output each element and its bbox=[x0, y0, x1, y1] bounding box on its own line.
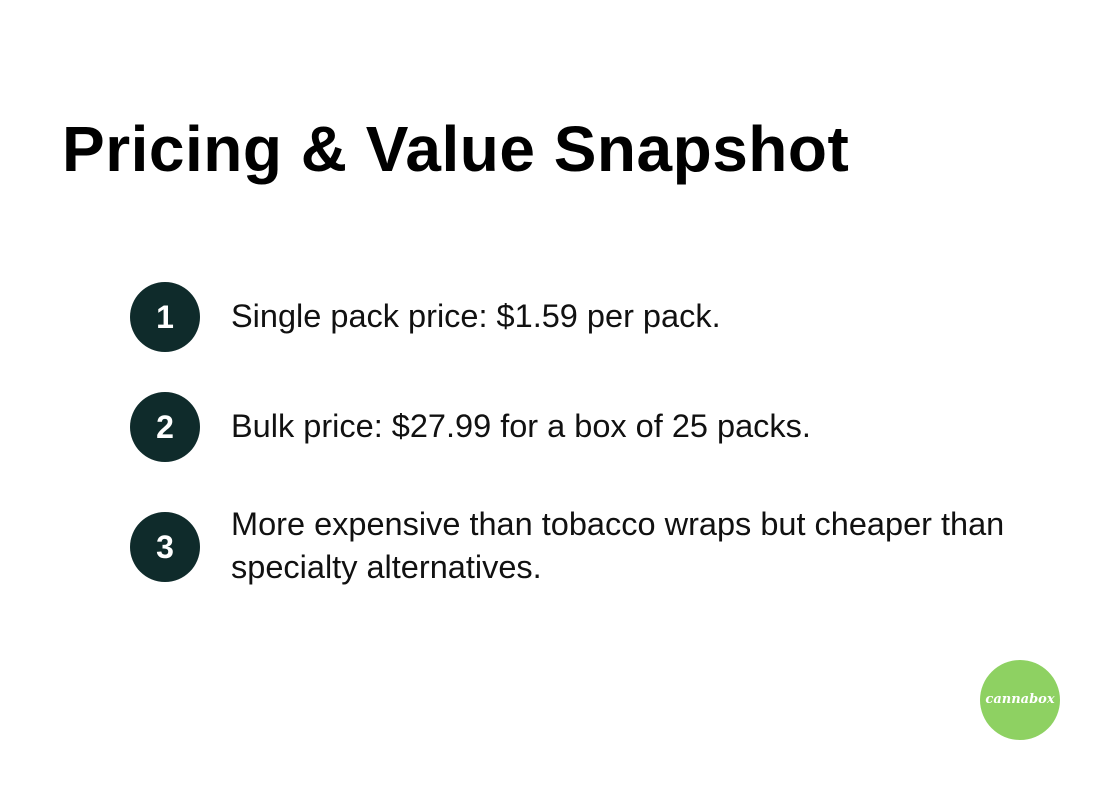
item 1 bbox=[130, 282, 721, 352]
text 3: More expensive than tobacco wraps but cheaper than specialty alternatives. bbox=[231, 506, 1004, 585]
number badge 3: 3 bbox=[156, 529, 174, 565]
title: Pricing & Value Snapshot bbox=[62, 113, 849, 185]
item 3 bbox=[130, 506, 1004, 585]
logo: cannabox bbox=[980, 660, 1060, 740]
logo: cannabox: cannabox bbox=[985, 692, 1055, 707]
text 2: Bulk price: $27.99 for a box of 25 packs. bbox=[231, 408, 811, 444]
number badge 2: 2 bbox=[156, 409, 174, 445]
item 2 bbox=[130, 392, 811, 462]
number badge 1 bbox=[130, 282, 200, 352]
number badge 1: 1 bbox=[156, 299, 174, 335]
text 1: Single pack price: $1.59 per pack. bbox=[231, 298, 721, 334]
number badge 3 bbox=[130, 512, 200, 582]
number badge 2 bbox=[130, 392, 200, 462]
